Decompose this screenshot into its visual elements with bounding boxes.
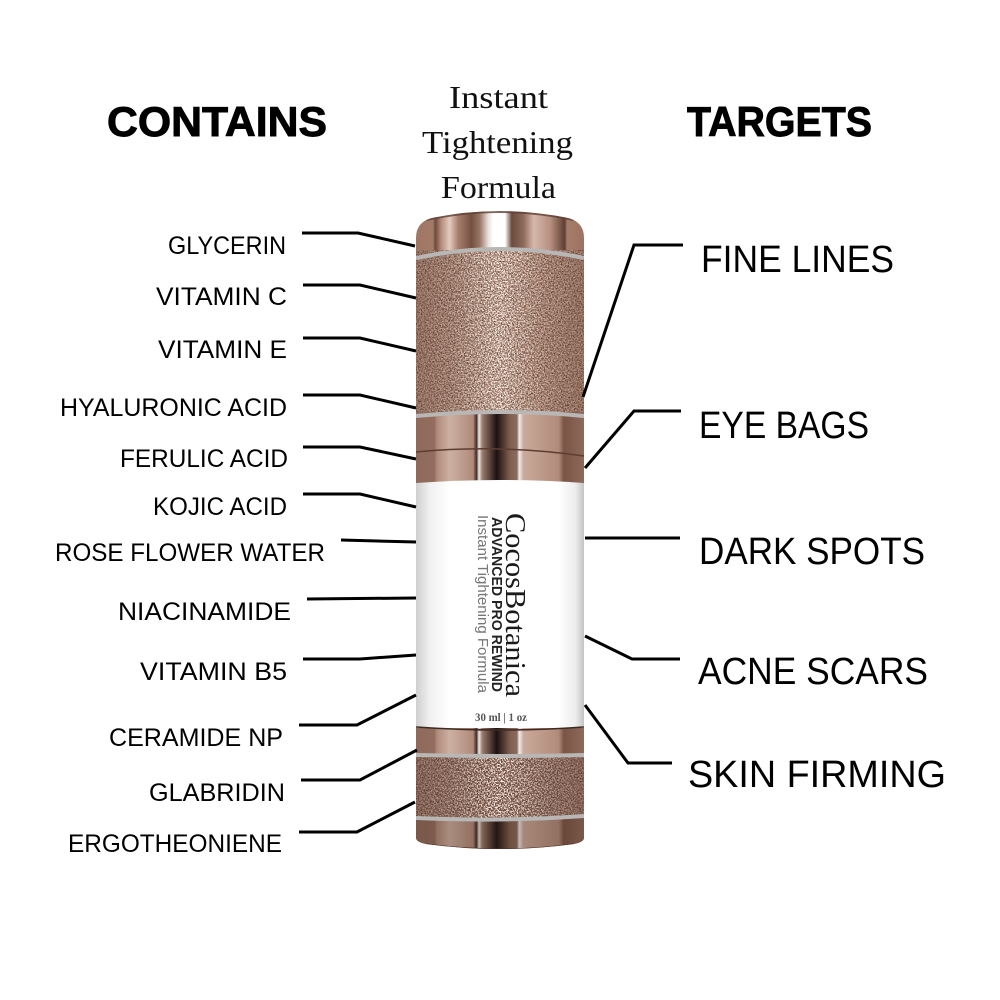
title: instant tightening formula: Formula [441, 169, 556, 205]
label text [474, 513, 530, 724]
metal collar [416, 412, 584, 484]
ingredient list: NIACINAMIDE [118, 598, 291, 626]
ingredient list: VITAMIN C [156, 283, 287, 311]
ingredient list: GLABRIDIN [149, 779, 285, 807]
ingredient list: FERULIC ACID [120, 445, 288, 473]
silver bands upper [416, 249, 584, 258]
bottle top cap [416, 211, 584, 250]
ingredient list: GLYCERIN [168, 232, 286, 260]
label text: Instant Tightening Formula [474, 515, 491, 694]
ingredient list: ERGOTHEONIENE [68, 830, 282, 858]
ingredient leader lines [299, 233, 417, 832]
ingredient list: VITAMIN E [158, 336, 287, 364]
ingredient list: ROSE FLOWER WATER [55, 539, 325, 567]
heading: targets: TARGETS [687, 98, 872, 145]
target list: FINE LINES [701, 239, 894, 281]
ingredient list: KOJIC ACID [153, 493, 287, 521]
target list: EYE BAGS [699, 405, 869, 447]
silver bands lower [416, 755, 584, 756]
target leader lines [583, 245, 683, 763]
bottle base [416, 818, 584, 849]
target list: SKIN FIRMING [688, 754, 946, 796]
label text: CocosBotanica [499, 513, 530, 698]
label text: ADVANCED PRO REWIND [488, 517, 504, 692]
title: instant tightening formula: Instant [449, 79, 548, 115]
title: instant tightening formula: Tightening [422, 124, 573, 160]
ingredient list [55, 232, 325, 858]
ingredient list: HYALURONIC ACID [60, 394, 287, 422]
target list: ACNE SCARS [698, 651, 928, 693]
ingredient list: VITAMIN B5 [140, 658, 287, 686]
label text: 30 ml | 1 oz [475, 712, 527, 724]
glitter section lower [416, 756, 584, 818]
heading: contains: CONTAINS [107, 98, 327, 145]
title: instant tightening formula [422, 79, 573, 205]
target list: DARK SPOTS [699, 531, 925, 573]
glitter section upper [416, 250, 584, 415]
lower metal collar [416, 728, 584, 754]
product bottle [416, 205, 584, 858]
white label [416, 480, 584, 730]
target list [688, 239, 946, 796]
ingredient list: CERAMIDE NP [109, 724, 283, 752]
